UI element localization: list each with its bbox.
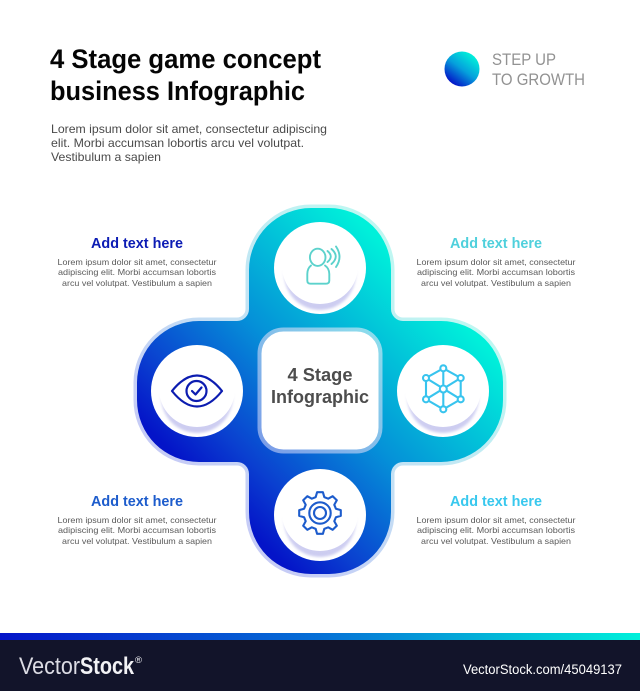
gradient footer bar — [0, 633, 640, 640]
footer logo: ® — [135, 655, 142, 665]
text block: bottom left: arcu vel volutpat. Vestibulum a sapien — [62, 536, 212, 546]
title: business Infographic — [50, 76, 305, 106]
centre label — [271, 364, 369, 407]
intro text block: elit. Morbi accumsan lobortis arcu vel volutpat. — [51, 136, 304, 150]
title: 4 Stage game concept — [50, 44, 321, 74]
icon: gradient orb — [444, 52, 480, 86]
text block: bottom right: Lorem ipsum dolor sit amet, consectetur — [416, 515, 576, 525]
text block: bottom right — [416, 494, 576, 546]
footer url: VectorStock.com/45049137 — [463, 662, 622, 677]
text block: top left: adipiscing elit. Morbi accumsan lobortis — [58, 267, 216, 277]
footer logo: Stock — [80, 653, 135, 680]
intro text block: Lorem ipsum dolor sit amet, consectetur adipiscing — [51, 122, 327, 136]
text block: bottom left — [58, 494, 217, 546]
text block: top right — [416, 236, 576, 288]
tagline: STEP UP — [492, 51, 556, 69]
cross-shaped diagram — [137, 208, 503, 574]
centre label: Infographic — [271, 386, 369, 407]
tagline — [492, 51, 585, 89]
footer logo: Vector — [19, 653, 80, 680]
text block: bottom right: Add text here — [450, 494, 542, 510]
text block: bottom right: arcu vel volutpat. Vestibulum a sapien — [421, 536, 571, 546]
footer logo — [19, 653, 142, 680]
icon: eye with check — [172, 376, 222, 406]
intro text block: Vestibulum a sapien — [51, 150, 161, 164]
bottom disc — [274, 469, 366, 561]
panel: cross background — [137, 208, 503, 574]
left disc — [151, 345, 243, 437]
top disc — [274, 222, 366, 314]
text block: bottom left: Lorem ipsum dolor sit amet, consectetur — [58, 515, 217, 525]
icon: person with sound waves — [307, 246, 340, 284]
text block: top right: adipiscing elit. Morbi accumsan lobortis — [417, 267, 575, 277]
icon: molecular network — [423, 365, 464, 412]
text block: top left — [58, 236, 217, 288]
footer — [0, 640, 640, 691]
text block: top right: Lorem ipsum dolor sit amet, consectetur — [416, 257, 576, 267]
centre label: 4 Stage — [288, 364, 352, 385]
text block: top right: arcu vel volutpat. Vestibulum a sapien — [421, 278, 571, 288]
text block: bottom right: adipiscing elit. Morbi accumsan lobortis — [417, 525, 575, 535]
text block: top right: Add text here — [450, 236, 542, 252]
text block: bottom left: adipiscing elit. Morbi accumsan lobortis — [58, 525, 216, 535]
panel: centre box — [260, 330, 380, 452]
tagline: TO GROWTH — [492, 71, 585, 89]
intro text block — [51, 122, 327, 164]
text block: top left: Lorem ipsum dolor sit amet, consectetur — [58, 257, 217, 267]
title — [50, 44, 321, 106]
text block: bottom left: Add text here — [91, 494, 183, 510]
icon: gear — [299, 492, 341, 534]
text block: top left: arcu vel volutpat. Vestibulum a sapien — [62, 278, 212, 288]
text block: top left: Add text here — [91, 236, 183, 252]
right disc — [397, 345, 489, 437]
